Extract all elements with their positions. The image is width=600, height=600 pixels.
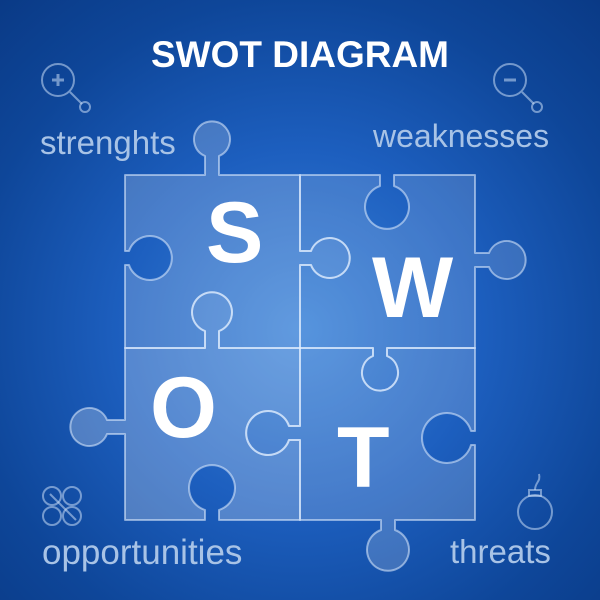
label: threats: threats xyxy=(450,533,551,570)
icon: bomb xyxy=(518,474,552,529)
icon: magnifier plus xyxy=(42,64,90,112)
piece: W xyxy=(300,175,526,391)
letter W: W xyxy=(372,240,453,336)
label: strenghts: strenghts xyxy=(40,124,176,161)
piece: O xyxy=(70,292,300,520)
label: weaknesses: weaknesses xyxy=(373,118,549,154)
letter T: T xyxy=(337,410,390,506)
label: opportunities: opportunities xyxy=(42,533,242,572)
piece: T xyxy=(246,348,475,571)
icon: magnifier minus xyxy=(494,64,542,112)
letter O: O xyxy=(150,360,217,456)
title: SWOT DIAGRAM xyxy=(151,34,449,75)
icon: clover xyxy=(43,487,81,525)
letter S: S xyxy=(206,185,263,281)
piece: S xyxy=(125,121,350,348)
